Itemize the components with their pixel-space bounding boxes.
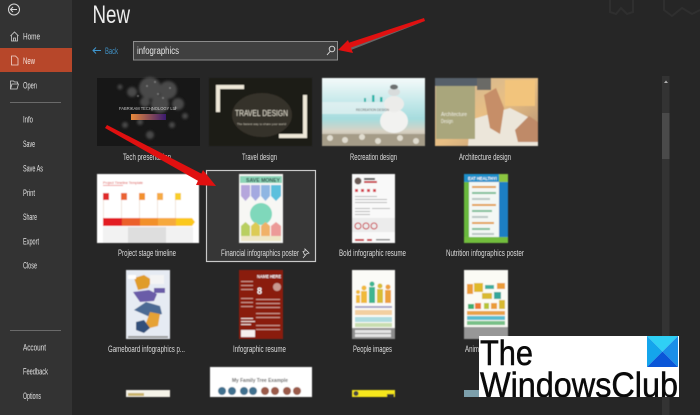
search box: infographics — [137, 46, 179, 57]
sidebar menu labels — [23, 32, 48, 401]
template: Travel design: The fastest way to share your world — [237, 122, 286, 126]
template: row 4 yellow thumbnail — [352, 390, 395, 397]
template: Tech presentation — [97, 77, 200, 146]
template: Infographic resume: 8 — [257, 286, 262, 296]
label: Architecture design: Architecture design — [459, 152, 511, 162]
template: Nutrition infographics poster — [464, 174, 508, 243]
label: Infographic resume: Infographic resume — [233, 344, 286, 354]
template: Project stage timeline — [97, 174, 199, 243]
sidebar menu labels: Print — [23, 188, 35, 198]
sidebar menu labels: Save As — [23, 164, 43, 174]
template: Architecture design: Architecture — [441, 112, 467, 118]
icon: open folder — [10, 81, 18, 89]
logo: The Windows Club: The — [480, 334, 533, 373]
label: Tech presentation: Tech presentation — [123, 152, 171, 162]
label: Recreation design: Recreation design — [350, 152, 397, 162]
label: Animal images: Animal images — [465, 344, 505, 354]
template: Travel design — [209, 78, 312, 146]
template: Architecture design — [435, 78, 538, 146]
search box — [134, 42, 338, 60]
template: Infographic resume: NAME HERE — [257, 274, 281, 279]
sidebar menu labels: Info — [23, 114, 33, 124]
template: row 4 teal thumbnail — [464, 390, 480, 397]
sidebar menu labels: Close — [23, 260, 37, 270]
icon: windows logo — [647, 336, 678, 367]
back link: Back — [105, 46, 118, 56]
template: My Family Tree Example: My Family Tree Example — [232, 378, 288, 384]
sidebar menu labels: Account — [23, 342, 46, 352]
title: New — [92, 1, 131, 29]
icon: pin — [303, 249, 309, 258]
sidebar menu labels: Home — [23, 32, 40, 42]
sidebar menu labels: Save — [23, 139, 35, 149]
template: Gameboard infographics poster — [126, 270, 170, 339]
logo: The Windows Club: WindowsClub — [480, 366, 678, 405]
sidebar — [0, 0, 72, 415]
template: Nutrition infographics poster: EAT HEALTHY! — [468, 176, 497, 181]
arrow: to financial infographics poster — [105, 125, 216, 186]
back link — [93, 46, 118, 56]
label: Financial infographics poster: Financial infographics poster — [221, 248, 299, 258]
scrollbar — [662, 76, 670, 415]
template: Recreation design — [322, 78, 425, 146]
template: Project stage timeline: Project Timeline Template — [103, 180, 144, 185]
highlighted New item — [0, 48, 72, 72]
sidebar menu labels: Options — [23, 391, 41, 401]
template: row 4 partial thumbnail — [126, 390, 170, 397]
template: Architecture design: Design — [441, 119, 453, 125]
label: Project stage timeline: Project stage timeline — [118, 248, 176, 258]
sidebar menu labels: Feedback — [23, 366, 48, 376]
template: Infographic resume — [239, 270, 283, 339]
template: Travel design: TRAVEL DESIGN — [235, 108, 288, 118]
label: People images: People images — [353, 344, 392, 354]
sidebar menu labels: New — [23, 56, 35, 66]
label: Gameboard infographics poster: Gameboard infographics p... — [108, 344, 185, 354]
template: Tech presentation: FABRIKAM TECHNOLOGY Ltd — [119, 106, 176, 111]
template: Bold infographic resume — [352, 174, 395, 243]
icon: home — [10, 32, 18, 41]
selected card: Financial infographics poster — [206, 170, 316, 262]
template: People images — [352, 270, 395, 339]
template: Recreation design: RECREATION DESIGN — [356, 108, 389, 112]
label: Bold infographic resume: Bold infographic resume — [339, 248, 406, 258]
icon: back arrow — [8, 4, 20, 15]
logo: The Windows Club — [479, 336, 679, 397]
sidebar menu labels: Open — [23, 80, 37, 90]
icon: magnifier — [327, 46, 335, 55]
template: My Family Tree Example — [210, 367, 312, 397]
template: Animal images — [464, 270, 508, 339]
sidebar menu labels: Export — [23, 236, 39, 246]
arrow: to search box — [338, 18, 425, 53]
decorative top-right shapes — [610, 0, 700, 16]
sidebar menu labels: Share — [23, 212, 37, 222]
label: Travel design: Travel design — [242, 152, 277, 162]
label: Nutrition infographics poster: Nutrition infographics poster — [446, 248, 524, 258]
poster thumbnail: SAVE MONEY — [246, 178, 281, 184]
icon: new document — [12, 56, 18, 65]
